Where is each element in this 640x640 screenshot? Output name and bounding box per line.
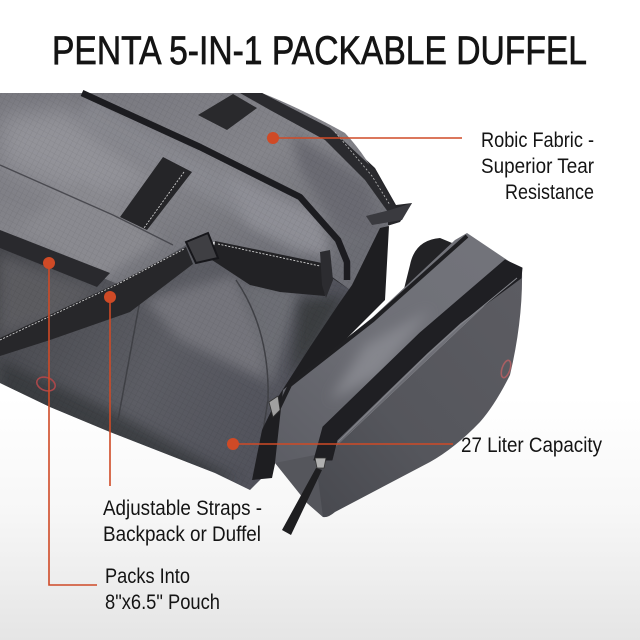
marker dot <box>43 257 55 269</box>
top side carry strap <box>240 93 396 212</box>
label: 27 Liter Capacity <box>461 434 602 457</box>
pouch top panel <box>275 233 522 463</box>
label: Backpack or Duffel <box>103 523 261 546</box>
leader line <box>233 443 453 445</box>
callout: Robic fabric <box>267 129 594 204</box>
left zipper band <box>0 230 110 287</box>
dark side pocket opening <box>252 226 389 480</box>
shoulder strap stitching <box>0 249 184 340</box>
label: Adjustable Straps - <box>103 497 262 520</box>
pouch fold highlight <box>330 310 430 400</box>
leader line <box>273 137 462 139</box>
zipper pull <box>282 468 322 535</box>
callout: capacity <box>227 434 602 457</box>
shoulder strap <box>0 247 193 356</box>
pouch band edge <box>338 278 517 442</box>
label: Packs Into <box>105 565 190 588</box>
pouch black band <box>314 260 522 460</box>
pouch lower end <box>275 455 323 517</box>
patch stitching <box>144 172 184 228</box>
zipper slider on bag <box>269 396 280 417</box>
leader line <box>49 263 97 585</box>
label: Robic Fabric - <box>481 129 594 152</box>
right strap stitching <box>218 244 320 266</box>
packed pouch <box>269 233 522 535</box>
zipper slider on pouch <box>315 458 326 468</box>
bag top panel <box>0 93 388 292</box>
pouch zipper edge <box>278 236 467 410</box>
bag side panel <box>0 235 350 490</box>
fabric highlights <box>0 96 380 280</box>
side loop behind bag <box>240 93 412 345</box>
strap buckle <box>186 233 218 263</box>
seam <box>0 165 173 245</box>
label: Superior Tear <box>481 155 594 178</box>
marker dot <box>267 132 279 144</box>
duffel bag <box>0 93 412 490</box>
webbing patch <box>120 157 192 230</box>
bag logo ring <box>35 375 57 393</box>
leader line <box>109 297 111 486</box>
pouch loop <box>400 238 457 312</box>
side panel folds <box>0 255 345 480</box>
ripstop texture <box>0 93 388 490</box>
pouch front face <box>307 270 522 517</box>
callout: pouch <box>43 257 220 614</box>
marker dot <box>227 438 239 450</box>
carry strap stitching <box>335 132 390 205</box>
side hardware ring <box>366 203 412 225</box>
callout: straps <box>103 291 262 546</box>
right strap section <box>212 241 325 296</box>
label: 8"x6.5" Pouch <box>105 591 220 614</box>
label: Resistance <box>505 181 594 204</box>
pouch logo ring <box>499 359 513 379</box>
side clip <box>320 250 333 298</box>
main zipper <box>82 93 347 280</box>
marker dot <box>104 291 116 303</box>
top handle patch <box>198 94 257 130</box>
